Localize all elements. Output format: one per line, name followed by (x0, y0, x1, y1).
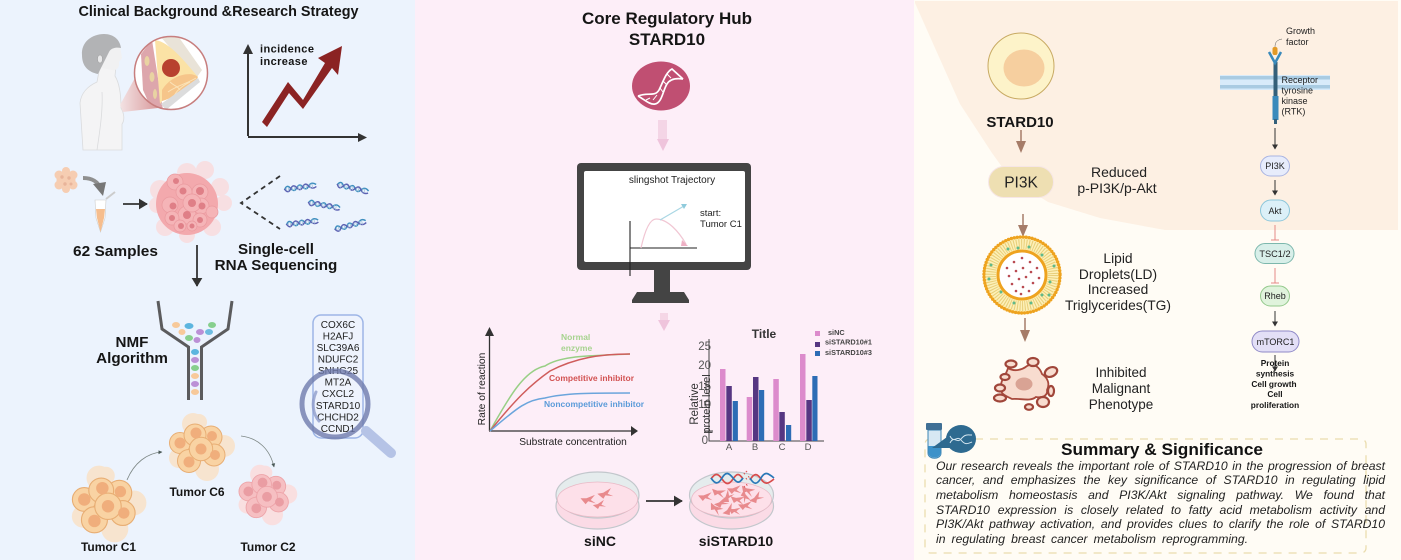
node: mTORC1 (1252, 331, 1299, 352)
axis label: relative protein level: Relative (689, 383, 701, 425)
gene list with magnifier: SNHG25 (318, 366, 358, 377)
PI3K pill: PI3K (1004, 174, 1038, 192)
legend: siNC (828, 328, 845, 337)
chart: relative protein level bars: C (779, 442, 786, 453)
text: pathway outputs: proliferation (1251, 400, 1299, 410)
icon: sample to tube (54, 167, 115, 232)
chart: relative protein level bars (689, 327, 872, 453)
summary box (925, 423, 1391, 553)
text: lipid droplets increased triglycerides: Triglycerides(TG) (1065, 298, 1171, 313)
icon: monitor with trajectory (577, 163, 751, 303)
node: Rheb (1260, 286, 1290, 306)
label: receptor tyrosine kinase: tyrosine (1282, 86, 1313, 96)
label: growth factor: factor (1286, 37, 1309, 47)
icon: membrane receptor (1220, 39, 1330, 124)
arrow: C1 to C6 (127, 452, 162, 480)
label: competitive inhibitor: Competitive inhibitor (549, 373, 635, 383)
inhibition: TSC to Rheb (1271, 268, 1279, 283)
icon: DNA fragments (284, 182, 369, 232)
chart: relative protein level bars: 25 (698, 341, 711, 353)
heading: core regulatory hub STARD10: Core Regulatory Hub (582, 9, 752, 28)
heading: summary and significance: Summary & Significance (1061, 441, 1263, 459)
icon: lipid droplet (984, 237, 1060, 313)
arrow: monitor to charts (658, 313, 670, 331)
gene list with magnifier: CHCHD2 (317, 412, 359, 424)
chart: relative protein level bars: 15 (698, 381, 711, 393)
text: lipid droplets increased triglycerides: Droplets(LD) (1079, 267, 1157, 282)
text: lipid droplets increased triglycerides: Lipid (1103, 251, 1133, 266)
gene list with magnifier: STARD10 (316, 401, 361, 412)
text: pathway outputs: Cell (1267, 389, 1283, 399)
node: mTORC1: mTORC1 (1257, 337, 1294, 347)
text: summary paragraph: cancer, and emphasizes the key significance of STARD10 in regulating lipid (936, 473, 1385, 487)
gene list with magnifier (302, 315, 391, 453)
text: summary paragraph (936, 459, 1391, 551)
node: Rheb: Rheb (1264, 291, 1286, 301)
panel: core regulatory hub (477, 9, 872, 549)
arrow: PI3K to lipid droplet (1018, 214, 1028, 237)
text: inhibited malignant phenotype: Malignant (1092, 381, 1151, 396)
label: tumor C6: Tumor C6 (169, 485, 225, 499)
text: slingshot trajectory: slingshot Trajectory (629, 175, 715, 186)
label: growth factor: Growth (1286, 26, 1315, 36)
label: rate of reaction: Rate of reaction (477, 352, 488, 425)
label: NMF algorithm: Algorithm (96, 350, 168, 367)
icon: DNA circle (632, 62, 690, 110)
legend (815, 328, 872, 357)
gene list with magnifier: COX6C (321, 320, 355, 331)
icon: magnifier (302, 371, 391, 453)
node: PI3K: PI3K (1265, 161, 1285, 171)
node: Akt: Akt (1268, 206, 1282, 216)
node: TSC1/2: TSC1/2 (1259, 249, 1291, 259)
label: STARD10: STARD10 (986, 114, 1054, 131)
label: single-cell RNA sequencing: RNA Sequencing (215, 257, 337, 274)
icon: STARD10 cell (988, 33, 1054, 99)
icon: single-cell tumor mass (149, 161, 232, 243)
chart: relative protein level bars: B (752, 442, 758, 453)
text: pathway outputs: Cell growth (1251, 379, 1297, 389)
label: substrate concentration: Substrate concentration (519, 437, 627, 448)
gene list with magnifier: H2AFJ (323, 332, 353, 342)
text: summary paragraph: STARD10 expression is closely related to fatty acid metabolism activity and (936, 503, 1385, 517)
icon: tumor C1 cluster (72, 466, 146, 542)
icon: siRNA helix (711, 470, 774, 487)
arrow: STARD10 to PI3K (1016, 130, 1026, 153)
arrow: tube to cells (123, 203, 147, 205)
chart: enzyme kinetics (477, 327, 645, 448)
icon: siSTARD10 culture dish (690, 470, 774, 529)
chart: relative protein level bars: 20 (698, 360, 711, 372)
arrow: DNA to monitor (657, 120, 669, 151)
text: reduced p-PI3K/p-Akt: Reduced (1091, 164, 1147, 180)
PI3K pill (988, 166, 1054, 198)
chart: relative protein level bars: 0 (702, 435, 708, 447)
arrow: C6 to C2 (241, 436, 274, 467)
text: reduced p-PI3K/p-Akt: p-PI3K/p-Akt (1077, 180, 1157, 196)
arrow: rising trend (262, 46, 342, 127)
label: single-cell RNA sequencing: Single-cell (238, 241, 314, 258)
icon: tumor C2 cluster (239, 465, 297, 525)
label: siSTARD10: siSTARD10 (699, 533, 773, 549)
icon: NMF funnel (158, 301, 232, 400)
chart: relative protein level bars: 10 (698, 399, 711, 411)
pathway: RTK PI3K Akt mTOR (1220, 26, 1330, 410)
arrow: RTK to PI3K (1274, 128, 1276, 149)
gene list with magnifier: NDUFC2 (318, 354, 359, 366)
axis label: protein level overlap: protein level (701, 374, 713, 434)
icon: woman silhouette with breast tumor inset (80, 34, 208, 150)
label: receptor tyrosine kinase: (RTK) (1282, 106, 1305, 116)
label: normal enzyme: enzyme (561, 343, 592, 353)
node: TSC1/2 (1255, 244, 1294, 264)
label: tumor C1: Tumor C1 (81, 540, 136, 554)
label: noncompetitive inhibitor: Noncompetitive inhibitor (544, 399, 645, 409)
gene list with magnifier: CXCL2 (322, 389, 355, 400)
text: start Tumor C1: Tumor C1 (700, 219, 742, 230)
arrow: lipid droplet to phenotype (1020, 318, 1030, 342)
heading: clinical background: Clinical Background &Research Strategy (78, 3, 359, 20)
text: lipid droplets increased triglycerides: Increased (1088, 282, 1148, 297)
text: pathway outputs: synthesis (1256, 368, 1295, 378)
arrow: sequencing to NMF (196, 245, 198, 286)
label: normal enzyme: Normal (561, 332, 590, 342)
chart: incidence increase (243, 44, 367, 142)
arrow: Rheb to mTORC1 (1274, 311, 1276, 326)
legend: siSTARD10#1 (825, 338, 872, 346)
text: pathway outputs: Protein (1261, 358, 1289, 368)
inhibition: Akt to TSC (1271, 225, 1279, 240)
icon: malignant cell (994, 358, 1059, 410)
text: incidence increase: increase (260, 56, 308, 68)
label: tumor C2: Tumor C2 (240, 540, 296, 554)
gene list with magnifier: CCND1 (321, 424, 356, 435)
panel: mechanism and summary (925, 26, 1391, 553)
icon: tumor C6 cluster (169, 413, 235, 481)
chart title: Title (752, 327, 777, 341)
text: start Tumor C1: start: (700, 208, 721, 219)
gene list with magnifier: MT2A (325, 378, 352, 388)
panel: clinical background and research strategy (54, 3, 391, 554)
node: Akt (1260, 200, 1290, 221)
arrow: siNC to siSTARD10 (646, 500, 682, 502)
label: 62 samples: 62 Samples (73, 243, 158, 260)
text: summary paragraph: in regulating breast cancer metabolism reprogramming. (936, 532, 1248, 546)
text: inhibited malignant phenotype: Phenotype (1089, 397, 1153, 412)
label: receptor tyrosine kinase: Receptor (1282, 75, 1318, 85)
gene list with magnifier: SLC39A6 (317, 343, 360, 354)
legend: siSTARD10#3 (825, 348, 872, 357)
text: summary paragraph: PI3K/Akt pathway activation, and provides clues to clarify the role of STARD10 (936, 517, 1385, 531)
node: PI3K (1260, 156, 1290, 176)
chart: trajectory (630, 204, 697, 276)
label: siNC: siNC (584, 533, 616, 549)
dashed split lines (241, 176, 280, 229)
chart: relative protein level bars: D (805, 442, 812, 453)
arrow: PI3K to Akt (1274, 180, 1276, 195)
text: summary paragraph: Our research reveals the important role of STARD10 in the progression of breast (936, 459, 1385, 473)
text: summary paragraph: metabolism homeostasis and PI3K/Akt signaling pathway. We found that (936, 488, 1385, 502)
label: receptor tyrosine kinase: kinase (1282, 96, 1308, 106)
chart: relative protein level bars: A (726, 442, 733, 453)
text: incidence increase: incidence (260, 44, 314, 56)
icon: siNC culture dish (556, 472, 639, 529)
arrow: mTORC1 to outputs (1274, 355, 1276, 371)
heading: core regulatory hub STARD10: STARD10 (629, 30, 705, 49)
text: inhibited malignant phenotype: Inhibited (1095, 365, 1147, 380)
label: NMF algorithm: NMF (116, 334, 148, 351)
icon: tube and DNA badge (926, 423, 976, 458)
